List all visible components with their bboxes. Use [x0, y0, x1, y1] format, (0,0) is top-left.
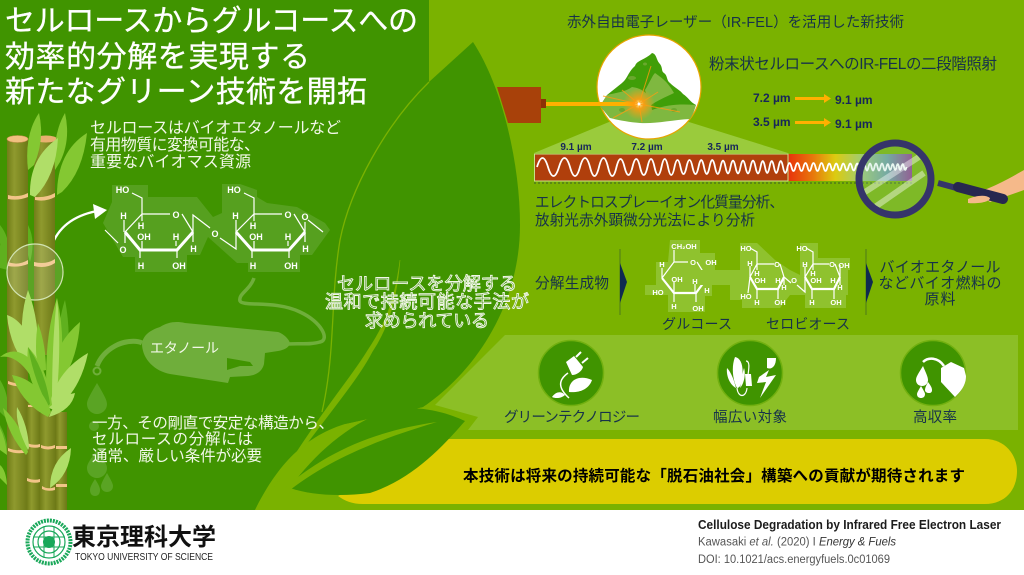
spectrum wavelength labels: 7.2 µm — [631, 142, 663, 153]
powder sample circle — [597, 35, 701, 139]
icon: green technology — [538, 340, 604, 406]
title: セルロースからグルコースへの — [5, 5, 418, 38]
bamboo top leaves — [27, 113, 87, 197]
citation: Kawasaki et al. (2020) I Energy & Fuels — [698, 536, 896, 548]
cellulose molecule: H — [138, 221, 144, 231]
glucose molecule: H — [671, 302, 677, 311]
label: glucose: グルコース — [662, 316, 732, 332]
text block: cellulose resource — [90, 119, 341, 171]
icon labels: グリーンテクノロジー — [504, 409, 640, 426]
background: dark green panel — [0, 0, 429, 510]
wavelength conditions: 9.1 µm — [835, 93, 873, 107]
leaf callout text: 求められている — [365, 311, 489, 331]
biofuel raw material text: バイオエタノール — [880, 259, 1000, 276]
text block: harsh conditions — [92, 414, 334, 465]
cellobiose molecule — [700, 243, 850, 308]
glucose molecule: O — [690, 258, 696, 267]
cellulose molecule: OH — [249, 232, 263, 242]
bamboo illustration — [0, 113, 88, 510]
citation: DOI: 10.1021/acs.energyfuels.0c01069 — [698, 554, 890, 566]
laser beam — [546, 102, 639, 106]
biofuel raw material text: などバイオ燃料の — [878, 274, 1002, 292]
bamboo stalks — [7, 136, 67, 510]
cellulose molecule: O — [211, 229, 219, 239]
icon: high yield — [900, 340, 966, 406]
bamboo magnifier circle — [7, 244, 63, 300]
label: ethanol: エタノール — [150, 340, 219, 356]
text block: harsh conditions: 一方、その剛直で安定な構造から、 — [92, 414, 334, 432]
citation: Cellulose Degradation by Infrared Free Electron Laser — [698, 518, 1001, 532]
fuel nozzle illustration — [94, 278, 324, 383]
university logo — [28, 520, 216, 564]
label: cellobiose: セロビオース — [766, 316, 850, 332]
cellulose molecule: O — [284, 210, 292, 220]
cellobiose molecule: H — [830, 276, 836, 285]
title: 新たなグリーン技術を開拓 — [5, 76, 367, 109]
cellulose molecule: H — [285, 232, 291, 242]
spectrum bar — [534, 154, 912, 183]
small leaf — [278, 408, 465, 495]
label: decomposition products: 分解生成物 — [535, 275, 609, 292]
big leaf — [330, 42, 520, 424]
heading: IR-FEL: 赤外自由電子レーザー（IR-FEL）を活用した新技術 — [567, 14, 904, 31]
cellulose molecule: O — [172, 210, 180, 220]
glucose molecule: OH — [671, 275, 683, 284]
wavelength conditions: 3.5 µm — [753, 115, 791, 129]
cellobiose molecule: O — [774, 260, 780, 269]
laser impact sparkle — [603, 66, 680, 122]
glucose molecule: OH — [705, 258, 717, 267]
glucose molecule: CH₂OH — [671, 242, 697, 251]
title: 効率的分解を実現する — [5, 41, 310, 74]
cellulose molecule: H — [173, 232, 179, 242]
magnifying glass with hand — [859, 143, 1024, 215]
glucose molecule: HO — [652, 288, 664, 297]
text block: cellulose resource: 有用物質に変換可能な、 — [90, 136, 260, 154]
wavelength conditions — [753, 91, 873, 131]
cellobiose molecule: OH — [754, 276, 766, 285]
analysis method text: 放射光赤外顕微分光法により分析 — [535, 212, 755, 229]
laser device — [497, 87, 546, 123]
cellulose molecule: H — [190, 244, 197, 254]
leaf callout text — [325, 274, 529, 331]
biofuel raw material text — [878, 259, 1002, 308]
cellobiose molecule: H — [802, 260, 808, 269]
fuel drops — [87, 383, 113, 496]
spectrum wavelength labels — [560, 142, 739, 153]
cellulose molecule: H — [250, 261, 256, 271]
chirped wave — [537, 158, 906, 176]
spectrum wavelength labels: 9.1 µm — [560, 142, 592, 153]
glucose molecule — [645, 240, 717, 313]
cellobiose molecule: O — [791, 276, 797, 285]
cellulose molecule: O — [119, 245, 127, 255]
glucose molecule: H — [659, 260, 665, 269]
cellobiose molecule: H — [810, 269, 816, 278]
cellobiose molecule: OH — [838, 261, 850, 270]
cellobiose molecule: H — [775, 276, 781, 285]
cellulose molecule: H — [302, 244, 309, 254]
analysis method text — [535, 193, 784, 229]
wavelength conditions: 9.1 µm — [835, 117, 873, 131]
glucose molecule: H — [704, 286, 710, 295]
glucose molecule: H — [692, 277, 698, 286]
cellobiose molecule: H — [754, 298, 760, 307]
text block: harsh conditions: 通常、厳しい条件が必要 — [92, 447, 262, 465]
cellobiose molecule: H — [837, 283, 843, 292]
leaf callout text: セルロースを分解する — [337, 274, 517, 294]
cellobiose molecule: HO — [740, 292, 752, 301]
leaf callout text: 温和で持続可能な手法が — [325, 292, 529, 312]
icon labels: 高収率 — [913, 409, 957, 426]
icon labels: 幅広い対象 — [713, 409, 787, 426]
university name in English: TOKYO UNIVERSITY OF SCIENCE — [75, 552, 213, 563]
cellobiose molecule: H — [809, 298, 815, 307]
cellulose molecule: O — [301, 212, 309, 222]
text block: harsh conditions: セルロースの分解には — [92, 430, 253, 448]
university name: 東京理科大学 — [72, 524, 216, 551]
cellulose molecule: H — [250, 221, 256, 231]
biofuel raw material text: 原料 — [924, 291, 956, 308]
analysis method text: エレクトロスプレーイオン化質量分析、 — [535, 193, 784, 211]
cellobiose molecule: H — [747, 259, 753, 268]
leaf outline and vein — [268, 82, 429, 497]
cellobiose molecule: HO — [740, 244, 752, 253]
wavelength conditions: 7.2 µm — [753, 91, 791, 105]
icon: broad feedstock — [718, 340, 782, 406]
citation — [698, 518, 1001, 566]
spectrum projection triangle — [534, 122, 788, 153]
footer — [0, 510, 1024, 575]
cellulose molecule: H — [232, 211, 239, 221]
cellobiose molecule: OH — [810, 276, 822, 285]
conclusion banner — [338, 439, 1017, 504]
icon labels — [504, 409, 957, 426]
bamboo lower leaves — [0, 290, 88, 488]
text block: cellulose resource: セルロースはバイオエタノールなど — [90, 119, 341, 137]
cellobiose molecule: O — [829, 260, 835, 269]
cellulose molecule: HO — [116, 185, 129, 195]
cellulose molecule: OH — [137, 232, 151, 242]
spectrum wavelength labels: 3.5 µm — [707, 142, 739, 153]
cellulose molecule: H — [138, 261, 144, 271]
glucose molecule: OH — [692, 304, 704, 313]
cellulose molecule: HO — [227, 185, 241, 195]
cellobiose molecule: H — [781, 283, 787, 292]
cellulose molecule: OH — [172, 261, 186, 271]
arrow: to biofuel — [866, 249, 873, 315]
cellulose molecule: H — [120, 211, 127, 221]
conclusion text: 本技術は将来の持続可能な「脱石油社会」構築への貢献が期待されます — [463, 466, 965, 485]
cellobiose molecule: HO — [796, 244, 808, 253]
icon panel background — [435, 335, 1018, 430]
subheading: two-stage irradiation: 粉末状セルロースへのIR-FELの二段階照射 — [709, 55, 997, 73]
cellobiose molecule: OH — [830, 298, 842, 307]
cellulose molecule: OH — [284, 261, 298, 271]
text block: cellulose resource: 重要なバイオマス資源 — [90, 153, 251, 171]
cellulose molecule — [103, 184, 330, 272]
cellobiose molecule: OH — [774, 298, 786, 307]
title — [5, 5, 418, 109]
logo emblem — [28, 520, 70, 564]
arrow: to products — [620, 249, 627, 315]
cellobiose molecule: H — [754, 269, 760, 278]
arrow: bamboo to molecule — [51, 204, 107, 247]
